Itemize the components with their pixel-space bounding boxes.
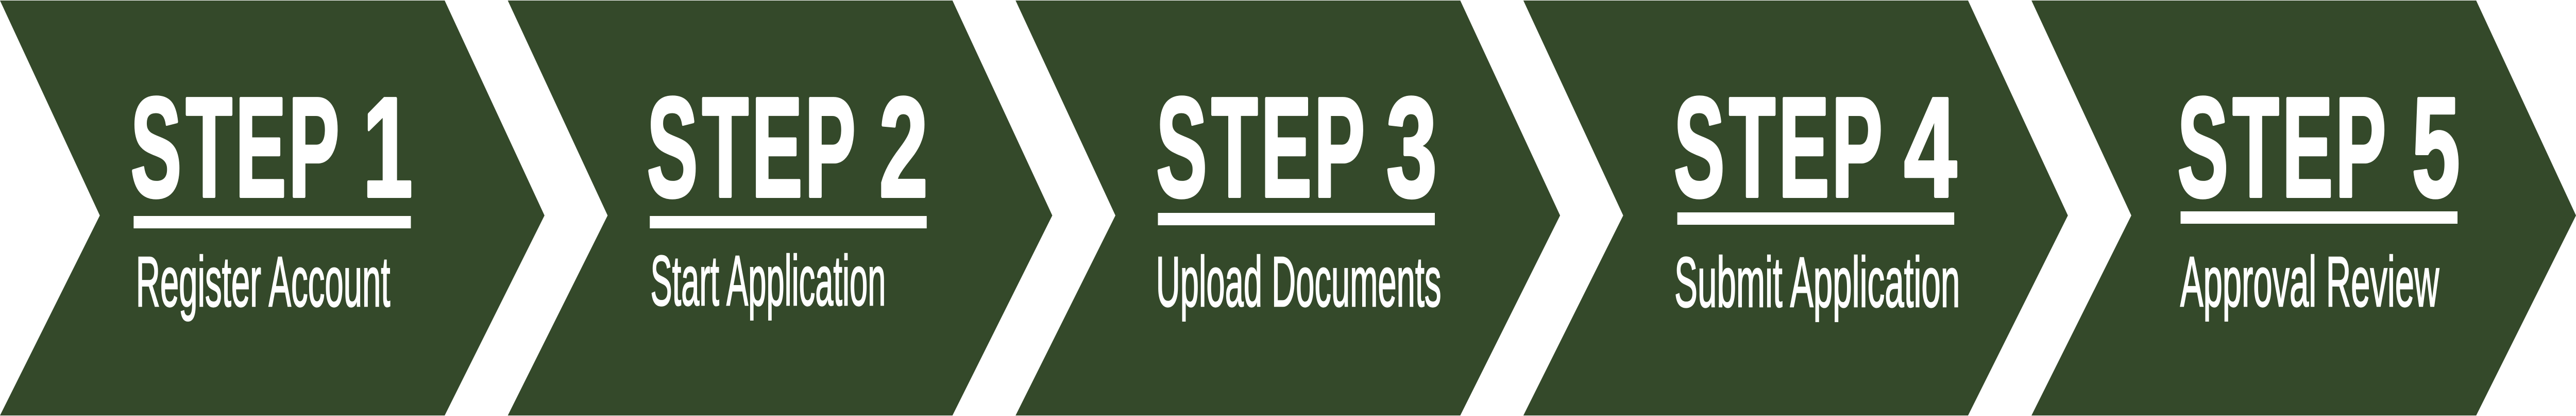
heading: step 5: 5 — [2412, 68, 2460, 227]
underline: step 3 — [1158, 213, 1435, 225]
panel: step 1 — [0, 1, 545, 415]
heading: step 2: STEP — [647, 68, 856, 227]
heading: step 5: STEP — [2177, 68, 2386, 227]
underline: step 2 — [650, 216, 927, 228]
heading: step 1: STEP — [131, 68, 340, 227]
panel: step 2 — [508, 1, 1052, 415]
heading: step 4: 4 — [1904, 68, 1957, 227]
label: step 1: Register Account — [136, 242, 391, 322]
panel: step 5 — [2031, 1, 2576, 415]
panel: step 4 — [1523, 1, 2068, 415]
heading: step 1: 1 — [363, 68, 413, 227]
label: step 4: Submit Application — [1674, 243, 1960, 322]
heading: step 2: 2 — [879, 68, 928, 227]
label: step 5: Approval Review — [2180, 242, 2439, 322]
label: step 2: Start Application — [650, 241, 886, 321]
underline: step 4 — [1677, 212, 1954, 225]
label: step 3: Upload Documents — [1156, 242, 1442, 322]
underline: step 5 — [2180, 211, 2458, 224]
heading: step 4: STEP — [1674, 68, 1883, 227]
heading: step 3: STEP — [1156, 68, 1365, 227]
underline: step 1 — [133, 216, 411, 228]
panel: step 3 — [1015, 1, 1560, 415]
heading: step 3: 3 — [1386, 68, 1437, 227]
